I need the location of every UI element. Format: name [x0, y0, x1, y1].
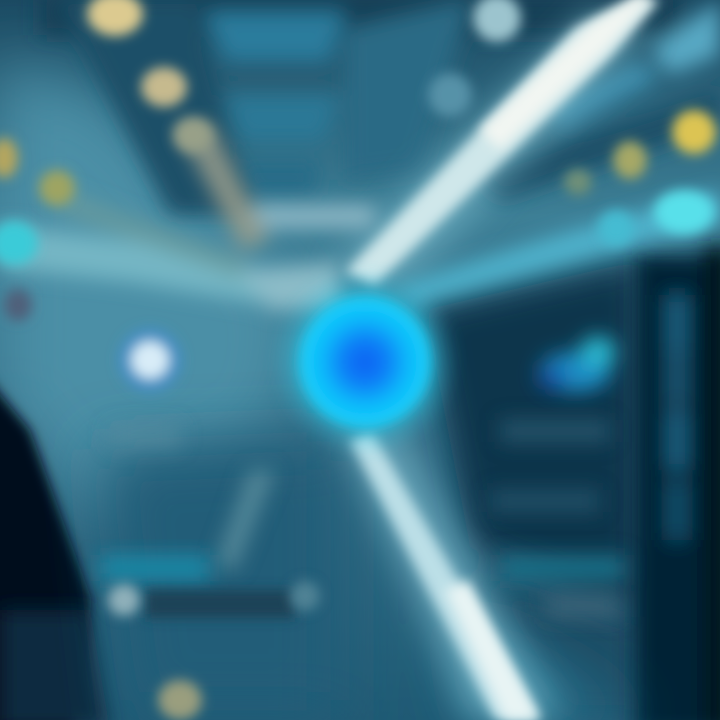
- left white glowing node: [118, 328, 182, 392]
- bottom-left dark wedge: [0, 370, 92, 720]
- cyan light bands: [0, 125, 720, 312]
- floor shading: [100, 440, 640, 720]
- ceiling panels: [40, 0, 720, 215]
- right blue glow: [538, 336, 616, 392]
- central glowing node: [283, 280, 447, 444]
- bright diagonal beam: upper: [345, 0, 660, 285]
- lower-left label bar: [100, 555, 320, 618]
- faint panel marks: [110, 420, 610, 570]
- bottom-left rack: [0, 610, 110, 720]
- right rack column: [635, 245, 720, 720]
- soft glow around lower beam: [340, 430, 560, 720]
- lower-right label bar: [500, 555, 625, 617]
- lower beam highlight: [445, 580, 540, 720]
- cyan lights: [0, 0, 714, 321]
- upper beam highlight: [480, 0, 650, 150]
- bright beam: lower: [350, 432, 540, 720]
- soft glow around upper beam: [330, 10, 650, 290]
- left lighter wash: [0, 60, 300, 520]
- right dark rack area: [425, 260, 640, 720]
